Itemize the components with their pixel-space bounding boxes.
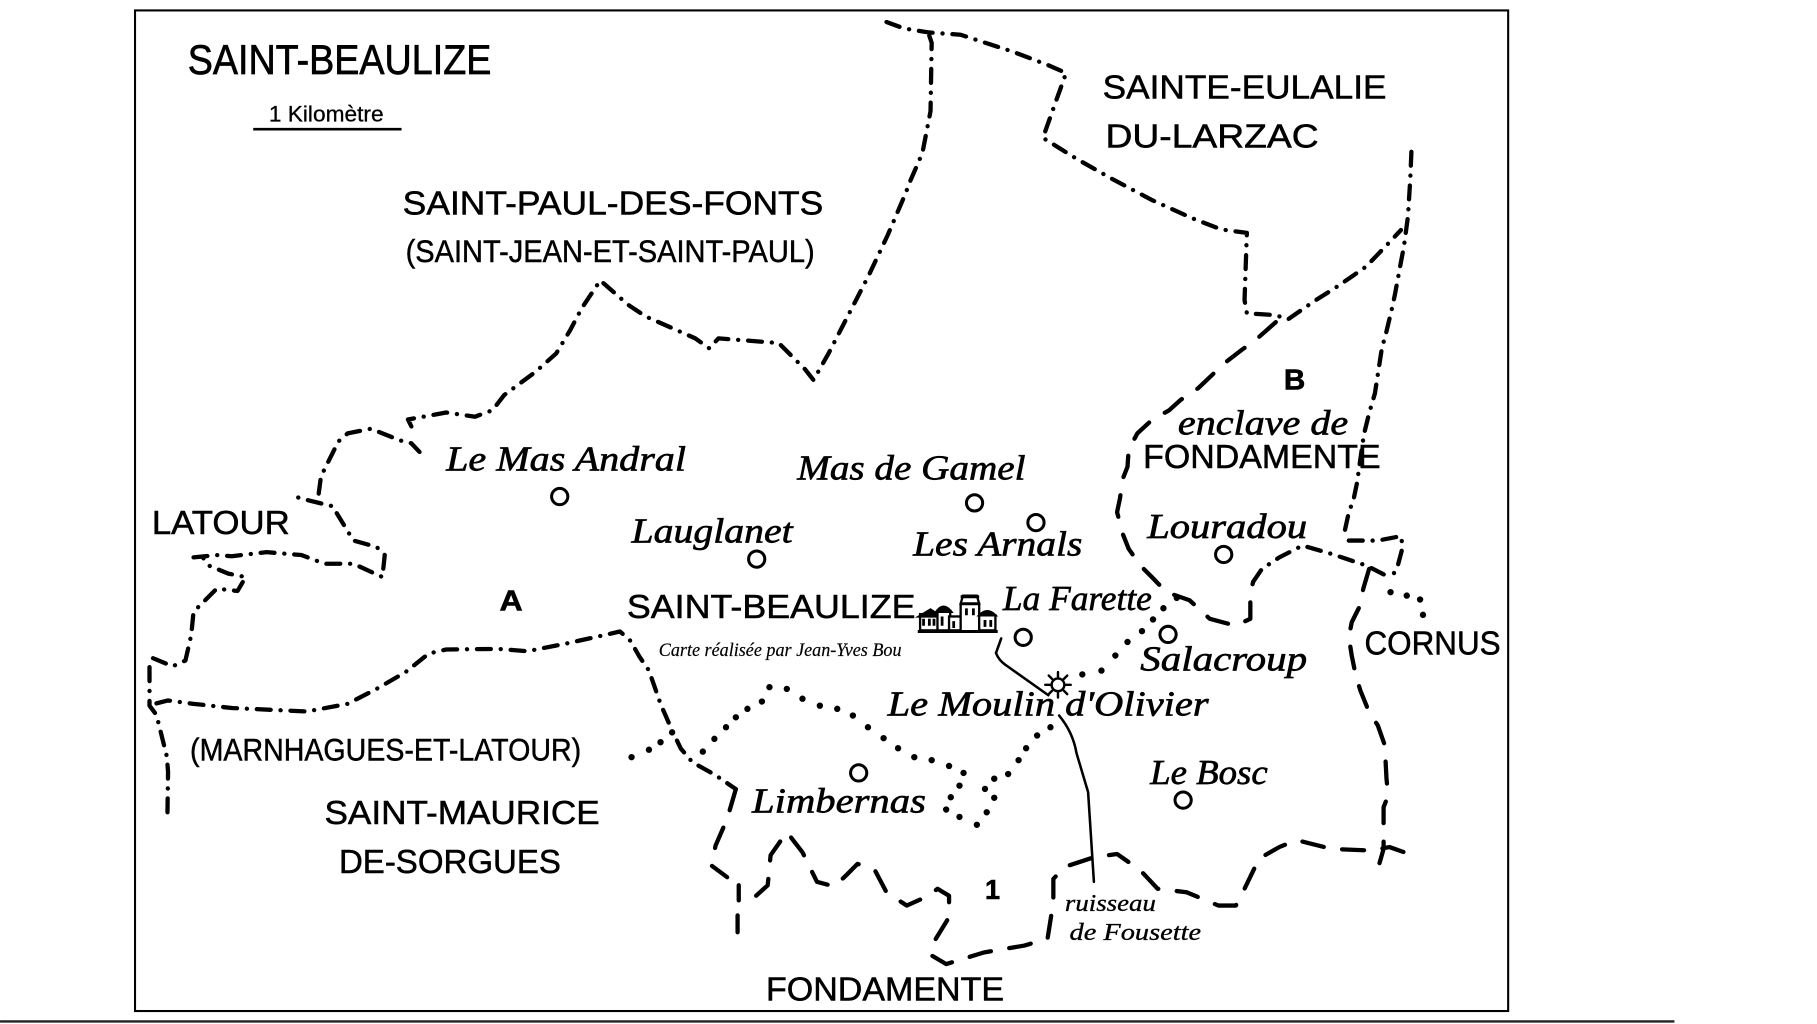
icon: village and castle (918, 596, 998, 632)
bottom rule (0, 1020, 1674, 1022)
dotted limits (632, 592, 1423, 825)
label: Le Moulin d'Olivier: Le Moulin d'Olivier (886, 685, 1209, 724)
label: Saint-Jean-et-Saint-Paul: (SAINT-JEAN-ET-SAINT-PAUL) (406, 234, 815, 269)
stream: upper section (996, 638, 1048, 695)
boundary: east commune limit (1253, 152, 1411, 582)
boundary: north-west commune limit (150, 22, 1401, 812)
label: ruisseau: ruisseau (1065, 890, 1156, 917)
label: Fondamente enclave: FONDAMENTE (1143, 438, 1381, 475)
label: Le Mas Andral: Le Mas Andral (445, 439, 686, 478)
boundary: enclave dashed limit (1117, 322, 1276, 626)
label: Marnhagues-et-Latour: (MARNHAGUES-ET-LATOUR) (190, 733, 581, 768)
boundary: central limit between Latour and Saint-Beaulize (156, 632, 736, 789)
label: section B: B (1284, 364, 1305, 396)
label: Le Bosc: Le Bosc (1149, 753, 1268, 792)
label: Salacroup: Salacroup (1140, 639, 1307, 678)
credit: Carte réalisée par Jean-Yves Bou (659, 640, 902, 661)
label: du-Larzac: DU-LARZAC (1105, 118, 1319, 155)
label: Saint-Beaulize village: SAINT-BEAULIZE (627, 588, 915, 625)
label: Les Arnals: Les Arnals (912, 525, 1082, 564)
label: de Fousette: de Fousette (1070, 919, 1201, 946)
label: Louradou: Louradou (1146, 507, 1307, 546)
label: Lauglanet: Lauglanet (630, 511, 794, 550)
label: section A: A (499, 586, 523, 618)
stream: lower section (1059, 716, 1094, 882)
label: Mas de Gamel: Mas de Gamel (796, 449, 1026, 488)
scale bar: 1 Kilomètre (269, 102, 384, 127)
label: Fondamente south: FONDAMENTE (766, 971, 1004, 1008)
boundary: east dashed limit (1349, 569, 1388, 869)
title: SAINT-BEAULIZE (188, 36, 491, 83)
map frame (135, 10, 1508, 1011)
label: enclave de: enclave de (1178, 404, 1348, 443)
label: La Farette: La Farette (1002, 579, 1152, 618)
label: Limbernas: Limbernas (751, 781, 926, 820)
label: Latour: LATOUR (152, 504, 290, 541)
label: Saint-Paul-des-Fonts: SAINT-PAUL-DES-FONTS (403, 184, 823, 221)
hamlet markers (552, 488, 1232, 808)
label: Saint-Maurice: SAINT-MAURICE (324, 794, 600, 831)
label: section 1: 1 (985, 874, 1000, 905)
label: Sainte-Eulalie: SAINTE-EULALIE (1103, 68, 1386, 105)
label: de-Sorgues: DE-SORGUES (339, 843, 561, 880)
boundary: south dashed limit (712, 789, 1413, 964)
label: Cornus: CORNUS (1364, 625, 1501, 662)
icon: mill wheel (1045, 672, 1071, 698)
